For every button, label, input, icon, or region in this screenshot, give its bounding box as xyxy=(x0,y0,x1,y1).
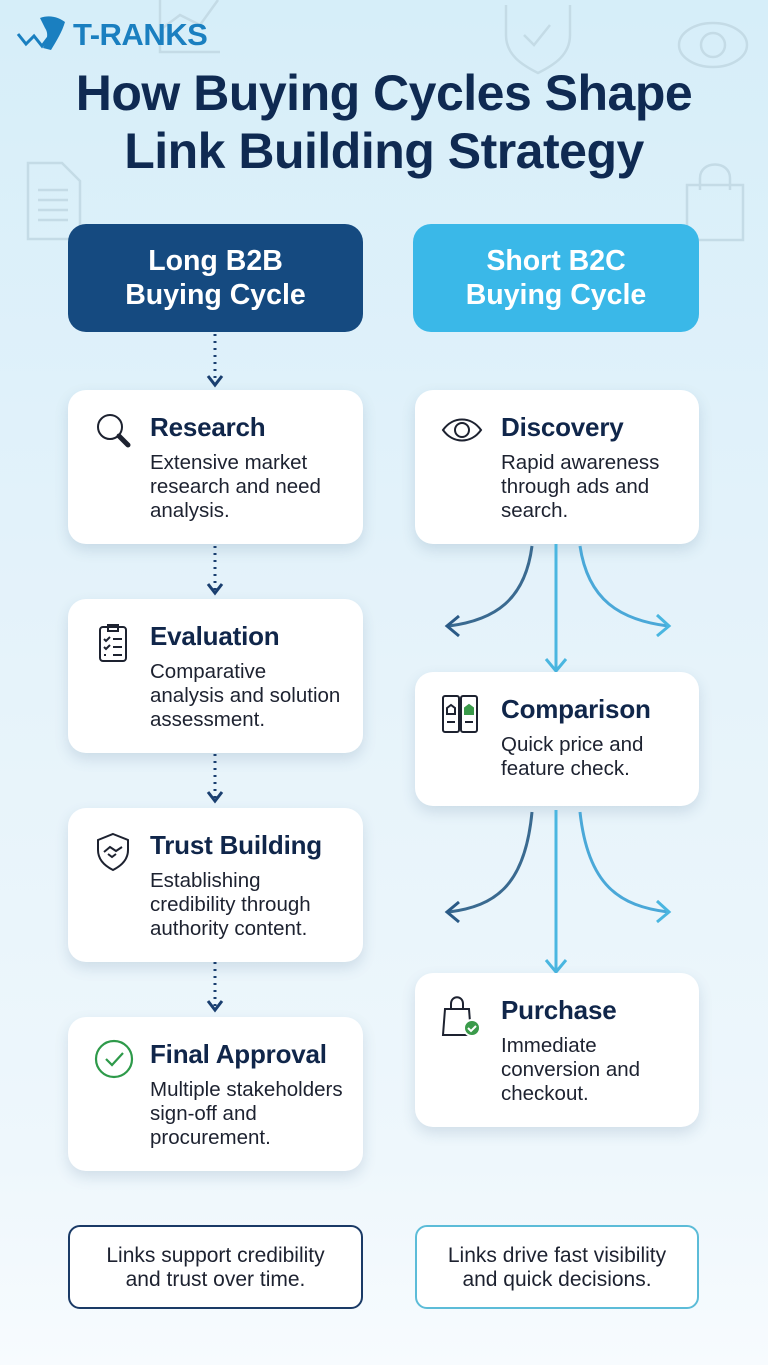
card: research xyxy=(68,390,363,544)
card: research: analysis. xyxy=(150,499,230,522)
card: trust building: authority content. xyxy=(150,917,307,940)
card: purchase: Purchase xyxy=(501,995,616,1025)
icon: bag check xyxy=(442,996,479,1036)
card: trust building: Trust Building xyxy=(150,830,322,860)
card: research: research and need xyxy=(150,475,321,498)
card: research: Research xyxy=(150,412,265,442)
footer: short: Links drive fast visibility xyxy=(448,1244,666,1267)
header: short B2C: Buying Cycle xyxy=(466,279,646,311)
card: comparison: feature check. xyxy=(501,757,630,780)
arrows: comparison to purchase xyxy=(444,810,672,973)
header: long B2B xyxy=(68,224,363,332)
title: How Buying Cycles Shape xyxy=(76,65,692,121)
card: discovery: search. xyxy=(501,499,568,522)
card: discovery: Rapid awareness xyxy=(501,451,659,474)
footer: long xyxy=(68,1225,363,1309)
icon: shield handshake xyxy=(97,832,129,872)
dotted arrows left xyxy=(206,334,224,1012)
card: discovery: through ads and xyxy=(501,475,649,498)
card: research: Extensive market xyxy=(150,451,307,474)
card: discovery xyxy=(415,390,699,544)
card: comparison: Comparison xyxy=(501,694,651,724)
card: evaluation: Comparative xyxy=(150,660,266,683)
card: final approval: Final Approval xyxy=(150,1039,327,1069)
card: final approval: Multiple stakeholders xyxy=(150,1078,343,1101)
title: Link Building Strategy xyxy=(124,123,644,179)
card: purchase: checkout. xyxy=(501,1082,589,1105)
footer: long: Links support credibility xyxy=(106,1244,325,1267)
icon: check circle xyxy=(94,1040,134,1078)
header: short B2C: Short B2C xyxy=(486,245,626,277)
card: trust building: Establishing xyxy=(150,869,261,892)
footer: long: and trust over time. xyxy=(126,1268,305,1291)
card: evaluation: Evaluation xyxy=(150,621,279,651)
card: purchase: Immediate xyxy=(501,1034,597,1057)
header: short B2C xyxy=(413,224,699,332)
icon: magnifier xyxy=(97,414,130,448)
card: discovery: Discovery xyxy=(501,412,624,442)
logo xyxy=(16,16,207,52)
card: final approval: sign-off and xyxy=(150,1102,257,1125)
card: comparison: Quick price and xyxy=(501,733,643,756)
card: evaluation: assessment. xyxy=(150,708,265,731)
icon: checklist xyxy=(99,624,127,662)
card: comparison xyxy=(415,672,699,806)
card: purchase: conversion and xyxy=(501,1058,640,1081)
card: purchase xyxy=(415,973,699,1127)
icon: phones compare xyxy=(442,695,478,733)
footer: short: and quick decisions. xyxy=(462,1268,652,1291)
header: long B2B: Buying Cycle xyxy=(125,279,306,311)
background icons xyxy=(26,0,748,242)
card: trust building xyxy=(68,808,363,962)
card: trust building: credibility through xyxy=(150,893,311,916)
footer: short xyxy=(415,1225,699,1309)
card: final approval xyxy=(68,1017,363,1171)
card: evaluation xyxy=(68,599,363,753)
title xyxy=(76,65,692,179)
card: final approval: procurement. xyxy=(150,1126,271,1149)
icon: eye xyxy=(442,418,482,442)
card: evaluation: analysis and solution xyxy=(150,684,340,707)
arrows: discovery to comparison xyxy=(444,544,672,672)
logo: T-RANKS xyxy=(73,17,207,52)
header: long B2B: Long B2B xyxy=(148,245,283,277)
